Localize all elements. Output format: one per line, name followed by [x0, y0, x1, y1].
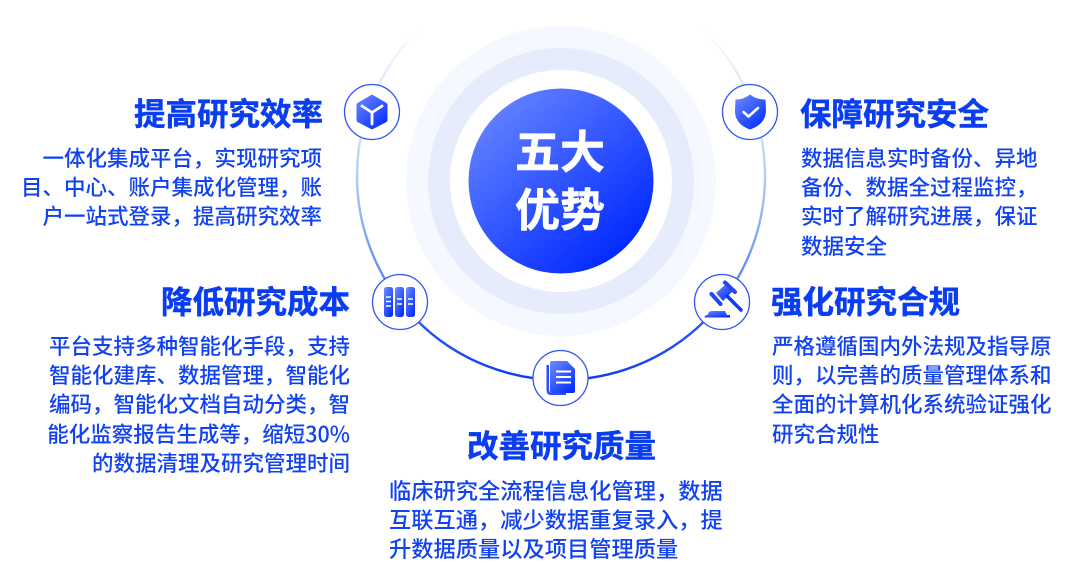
- text: 改善研究质量 description: [389, 478, 723, 562]
- text: 降低研究成本 description: 的数据清理及研究管理时间: [92, 452, 350, 476]
- text: 保障研究安全 description: 备份、数据全过程监控，: [801, 176, 1038, 200]
- text: 降低研究成本 description: [47, 335, 350, 476]
- text: 强化研究合规 description: 则，以完善的质量管理体系和: [772, 364, 1052, 388]
- icon: shield: [722, 84, 778, 140]
- text: 降低研究成本 description: 智能化建库、数据管理，智能化: [49, 364, 350, 388]
- text: 强化研究合规 description: 研究合规性: [772, 423, 880, 447]
- text: 保障研究安全 description: [801, 147, 1038, 259]
- icon: binders: [372, 274, 428, 330]
- heading: 强化研究合规: 强化研究合规: [771, 284, 960, 320]
- heading: 保障研究安全: 保障研究安全: [800, 96, 989, 132]
- heading: 降低研究成本: 降低研究成本: [161, 284, 350, 320]
- text: 保障研究安全 description: 实时了解研究进展，保证: [801, 205, 1038, 229]
- text: 强化研究合规 description: 全面的计算机化系统验证强化: [772, 393, 1052, 417]
- text: 提高研究效率 description: 一体化集成平台，实现研究项: [42, 147, 322, 171]
- text: 保障研究安全 description: 数据安全: [801, 235, 887, 259]
- text: 改善研究质量 description: 升数据质量以及项目管理质量: [389, 537, 678, 562]
- text: 强化研究合规 description: 严格遵循国内外法规及指导原: [772, 335, 1052, 359]
- text: 降低研究成本 description: 平台支持多种智能化手段，支持: [49, 335, 350, 359]
- concentric halo: [406, 26, 716, 336]
- icon: cube: [344, 84, 400, 140]
- text: 强化研究合规 description: [772, 335, 1052, 447]
- text: 降低研究成本 description: 编码，智能化文档自动分类，智: [49, 393, 350, 417]
- text: 改善研究质量 description: 互联互通，减少数据重复录入，提: [389, 508, 723, 533]
- text: 降低研究成本 description: 能化监察报告生成等，缩短30%: [47, 418, 350, 449]
- text: 改善研究质量 description: 临床研究全流程信息化管理，数据: [389, 478, 723, 504]
- center title: [515, 127, 605, 236]
- outer ring: [357, 0, 765, 380]
- icon: gavel: [694, 274, 750, 330]
- heading: 提高研究效率: 提高研究效率: [134, 96, 323, 132]
- text: 保障研究安全 description: 数据信息实时备份、异地: [801, 147, 1038, 171]
- text: 提高研究效率 description: 目、中心、账户集成化管理，账: [21, 176, 322, 200]
- core circle: [468, 88, 654, 274]
- text: 提高研究效率 description: 户一站式登录，提高研究效率: [42, 205, 322, 229]
- center title: 优势: [515, 185, 605, 236]
- text: 提高研究效率 description: [21, 147, 322, 229]
- heading: 改善研究质量: 改善研究质量: [467, 428, 656, 464]
- icon: documents: [533, 350, 588, 406]
- center title: 五大: [515, 127, 605, 178]
